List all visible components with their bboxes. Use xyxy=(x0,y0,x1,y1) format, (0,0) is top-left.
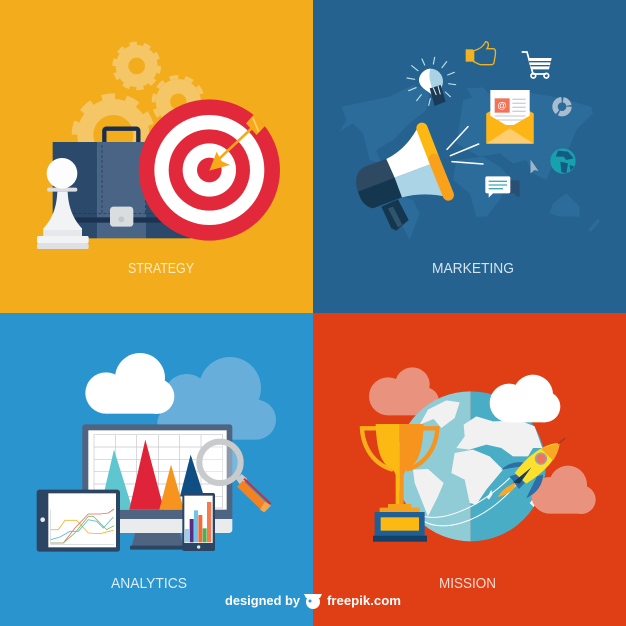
credit: freepik: freepik.com xyxy=(327,593,401,608)
icon: phone with bar chart xyxy=(182,493,215,551)
icon: pink cloud right xyxy=(531,466,596,514)
icon: envelope: @ xyxy=(497,101,507,111)
icon: shopping cart xyxy=(522,52,552,78)
credit: freepik xyxy=(225,593,401,609)
panel: strategy xyxy=(0,0,313,313)
icon: briefcase xyxy=(53,129,191,238)
icon: chat bubbles xyxy=(485,176,520,198)
panel: marketing xyxy=(313,0,626,313)
icon: light cloud xyxy=(157,357,276,440)
panel: analytics xyxy=(0,313,313,626)
heading: mission: MISSION xyxy=(439,575,496,592)
credit: freepik: designed by xyxy=(225,593,301,608)
icon: magnifying glass xyxy=(199,442,271,512)
icon: light bulb xyxy=(407,57,456,106)
icon: white cloud xyxy=(490,375,560,422)
icon: gears xyxy=(75,44,203,174)
icon: envelope xyxy=(486,90,534,144)
icon: trophy xyxy=(362,424,437,542)
icon: donut chart xyxy=(555,100,569,114)
heading: analytics: ANALYTICS xyxy=(111,575,187,592)
icon: freepik mascot xyxy=(304,594,322,609)
icon: tablet with line chart xyxy=(37,490,120,552)
heading: strategy: STRATEGY xyxy=(128,260,194,277)
icon: chess pawn xyxy=(37,158,89,249)
icon: white cloud xyxy=(85,353,174,414)
icon: megaphone xyxy=(356,125,483,231)
icon: globe xyxy=(550,148,576,174)
illustration: globe xyxy=(396,391,546,541)
icon: target with arrow xyxy=(139,99,280,241)
icon: pink cloud left xyxy=(369,367,439,415)
icon: cursor xyxy=(530,160,538,174)
icon: thumbs up xyxy=(466,42,495,65)
icon: rocket xyxy=(498,438,565,498)
panel: mission xyxy=(313,313,626,626)
heading: marketing: MARKETING xyxy=(432,260,514,277)
world map xyxy=(340,85,600,240)
icon: monitor with chart xyxy=(82,424,232,550)
